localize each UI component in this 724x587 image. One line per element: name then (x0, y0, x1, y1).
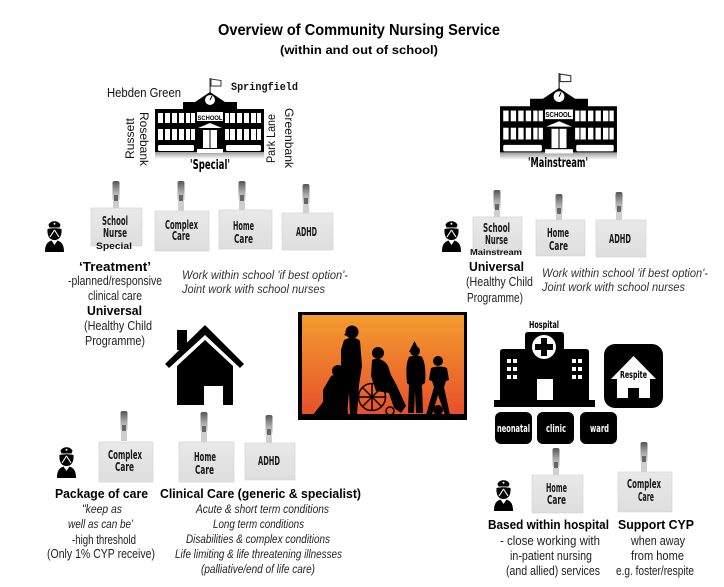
badge: ADHD: ADHD (609, 232, 631, 246)
box: neonatal (495, 412, 532, 444)
school names: Park Lane (264, 114, 278, 163)
badge: home care: Care (195, 463, 214, 477)
badge: home care: Home (233, 219, 254, 233)
text: clinical care: Long term conditions (213, 519, 304, 531)
icon: nurse (494, 480, 513, 511)
badge: complex care (99, 411, 153, 482)
badge: complex care: Complex (627, 477, 661, 491)
text: joint work note: Work within school 'if best option'- (182, 268, 348, 282)
text: support CYP (616, 517, 694, 578)
text: treatment: -planned/responsive (68, 274, 162, 288)
icon: respite house: Respite (620, 370, 647, 381)
badge: school nurse special (91, 181, 142, 252)
badge: home care: Care (547, 493, 566, 507)
badge: complex care (155, 181, 209, 251)
icon: special school building: SCHOOL (198, 115, 223, 122)
badge: ADHD: ADHD (258, 454, 280, 468)
badge: complex care (618, 442, 672, 512)
badge: home care: Home (194, 450, 216, 464)
school names: Greenbank (282, 108, 296, 169)
icon: respite house (604, 344, 663, 408)
text: treatment: clinical care (88, 289, 142, 303)
school names: Springfield (231, 82, 298, 94)
text: joint work note: Joint work with school nurses (541, 280, 685, 294)
badge: ADHD (596, 192, 646, 257)
text: treatment (68, 259, 162, 348)
badge: school nurse special: Nurse (103, 226, 127, 240)
text: package of care: "keep as (82, 504, 122, 516)
text: package of care: (Only 1% CYP receive) (47, 547, 155, 561)
badge: school nurse special: Special (96, 241, 132, 252)
title: Overview of Community Nursing Service (218, 22, 500, 39)
text: treatment: ‘Treatment’ (79, 259, 151, 274)
text: support CYP: Support CYP (618, 517, 694, 532)
badge: complex care: Complex (108, 448, 142, 462)
panel: special schools (45, 78, 348, 348)
badge: home care: Care (234, 232, 253, 246)
box: ward (580, 412, 617, 444)
badge: ADHD (245, 415, 295, 480)
badge: home care (536, 194, 585, 256)
text: universal: Programme) (467, 291, 523, 305)
box: clinic (537, 412, 574, 444)
text: clinical care: Life limiting & life threatening illnesses (175, 549, 342, 561)
icon: nurse (57, 447, 76, 478)
badge: school nurse mainstream: Mainstream (470, 248, 522, 257)
badge: complex care: Complex (165, 218, 198, 232)
badge: complex care: Care (172, 229, 190, 243)
text: based within hospital (488, 517, 609, 578)
badge: home care: Home (547, 226, 569, 240)
text: package of care: Package of care (55, 486, 148, 501)
text: joint work note (181, 268, 348, 296)
text: support CYP: when away (630, 534, 686, 548)
box: ward: ward (590, 422, 609, 435)
box: neonatal: neonatal (497, 422, 530, 435)
badge: school nurse special: School (102, 214, 128, 228)
icon: special school building (155, 78, 264, 159)
badge: home care: Home (546, 481, 567, 495)
subtitle: (within and out of school) (280, 43, 438, 57)
text: support CYP: from home (631, 549, 684, 563)
text: based within hospital: (and allied) services (506, 564, 600, 578)
title (218, 22, 500, 57)
icon: hospital building (494, 320, 595, 407)
panel: mainstream schools (442, 73, 708, 305)
icon: hospital building: Hospital (529, 320, 559, 331)
text: package of care (47, 486, 155, 561)
text: joint work note: Joint work with school nurses (181, 282, 325, 296)
badge: home care (219, 181, 272, 249)
icon: nurse (45, 221, 64, 252)
text: clinical care: Clinical Care (generic & specialist) (160, 486, 361, 501)
text: clinical care: Disabilities & complex conditions (186, 534, 330, 546)
school names: Hebden Green (107, 86, 181, 100)
icon: house (165, 325, 244, 405)
text: clinical care (160, 486, 361, 576)
text: universal: (Healthy Child (466, 275, 533, 289)
text: package of care: well as can be' (68, 519, 134, 531)
badge: home care: Care (549, 239, 568, 253)
text: support CYP: e.g. foster/respite (616, 564, 694, 578)
school names (107, 82, 298, 169)
photo: children and young people silhouettes (298, 312, 467, 420)
text: treatment: Programme) (85, 334, 145, 348)
badge: complex care: Care (115, 460, 134, 474)
text: based within hospital: in-patient nursing (510, 549, 592, 563)
text: joint work note (541, 266, 708, 294)
icon: nurse (442, 221, 461, 252)
panel: hospital (488, 320, 694, 578)
badge: school nurse mainstream: School (483, 221, 510, 235)
badge: ADHD: ADHD (296, 225, 317, 239)
badge: complex care: Care (638, 490, 654, 504)
icon: mainstream school building (500, 73, 617, 160)
icon: mainstream school building: SCHOOL (546, 112, 572, 119)
text: based within hospital: - close working with (500, 534, 600, 548)
box: clinic: clinic (546, 422, 566, 435)
badge: home care (532, 448, 583, 513)
text: clinical care: (palliative/end of life care) (201, 564, 315, 576)
text: treatment: Universal (87, 303, 142, 318)
badge: home care (179, 412, 234, 482)
text: clinical care: Acute & short term conditions (195, 504, 329, 516)
label: mainstream: 'Mainstream' (528, 156, 588, 171)
badge: ADHD (282, 184, 333, 250)
text: universal: Universal (469, 259, 524, 274)
text: joint work note: Work within school 'if best option'- (542, 266, 708, 280)
text: based within hospital: Based within hospital (488, 517, 609, 532)
text: package of care: -high threshold (72, 533, 136, 547)
badge: school nurse mainstream (470, 190, 522, 257)
text: treatment: (Healthy Child (84, 319, 152, 333)
school names: Russett (123, 117, 137, 159)
badge: school nurse mainstream: Nurse (485, 233, 508, 247)
panel: home (47, 325, 361, 576)
text: universal (466, 259, 533, 305)
school names: Rosebank (137, 112, 151, 167)
label: special: 'Special' (190, 158, 230, 173)
